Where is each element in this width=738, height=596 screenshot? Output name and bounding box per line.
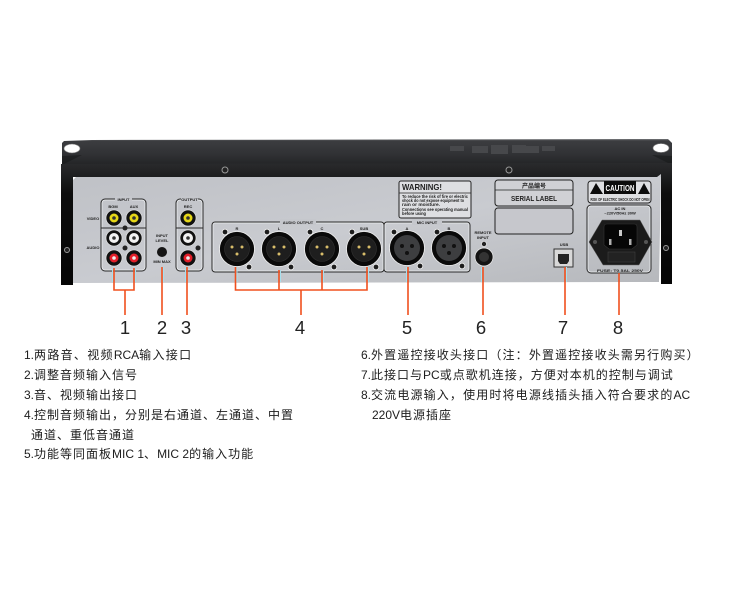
descriptions right: 6.外置遥控接收头接口（注：外置遥控接收头需另行购买） bbox=[361, 347, 700, 362]
descriptions left: 1.两路音、视频RCA输入接口 bbox=[24, 347, 192, 362]
descriptions left: 5.功能等同面板MIC 1、MIC 2的输入功能 bbox=[24, 446, 254, 461]
output RCA panel: REC bbox=[184, 204, 192, 209]
input RCA panel: AUX bbox=[130, 204, 139, 209]
descriptions right bbox=[361, 347, 700, 422]
warning label: WARNING! bbox=[402, 182, 442, 192]
descriptions left bbox=[24, 347, 294, 461]
top lid bbox=[62, 139, 672, 165]
RCA jacks bbox=[106, 210, 142, 266]
mic input panel bbox=[384, 219, 470, 272]
mic input panel: B bbox=[448, 226, 451, 231]
input RCA panel: INPUT bbox=[118, 197, 130, 202]
callout numbers: 3 bbox=[181, 317, 191, 338]
top vents bbox=[450, 145, 555, 154]
black frame bbox=[61, 163, 672, 285]
device rear panel bbox=[61, 139, 672, 285]
channel labels: C bbox=[321, 226, 324, 231]
warning label: Connections see operating manual bbox=[402, 207, 468, 212]
channel labels: SUB bbox=[360, 226, 368, 231]
descriptions left: 通道、重低音通道 bbox=[31, 427, 135, 442]
audio output panel: AUDIO OUTPUT bbox=[283, 220, 314, 225]
output RCA panel bbox=[176, 196, 203, 271]
descriptions left: 4.控制音频输出，分别是右通道、左通道、中置 bbox=[24, 407, 294, 422]
XLR male connectors bbox=[220, 232, 382, 266]
lid corner plates bbox=[62, 155, 672, 165]
serial label: SERIAL LABEL bbox=[511, 196, 558, 203]
power inlet: ~220V/50Hz 30W bbox=[604, 210, 636, 216]
mic input panel: A bbox=[406, 226, 409, 231]
warning label: To reduce the risk of fire or electric bbox=[402, 194, 469, 199]
warning label: rain or moisture. bbox=[402, 202, 440, 207]
callout numbers: 6 bbox=[476, 317, 486, 338]
input RCA panel: AUDIO bbox=[87, 245, 99, 250]
remote input: REMOTE bbox=[474, 230, 492, 235]
serial label bbox=[495, 180, 573, 234]
descriptions right: 8.交流电源输入，使用时将电源线插头插入符合要求的AC bbox=[361, 387, 690, 402]
callout numbers: 1 bbox=[120, 317, 130, 338]
audio output panel bbox=[212, 219, 384, 272]
input level knob: MIN MAX bbox=[153, 259, 171, 264]
callout numbers: 8 bbox=[613, 317, 623, 338]
usb port bbox=[554, 242, 573, 267]
RCA jacks bbox=[180, 210, 200, 266]
input level knob bbox=[153, 233, 171, 264]
callout lines bbox=[112, 267, 619, 315]
connector screws bbox=[391, 229, 465, 269]
input RCA panel: BGM bbox=[108, 204, 118, 209]
caution label: CAUTION bbox=[606, 184, 635, 193]
input level knob: LEVEL bbox=[156, 238, 169, 243]
callout numbers bbox=[120, 317, 623, 338]
channel labels: L bbox=[278, 226, 281, 231]
caution label bbox=[588, 181, 651, 203]
output RCA panel: OUTPUT bbox=[181, 197, 198, 202]
descriptions right: 220V电源插座 bbox=[372, 407, 452, 422]
grey panel bbox=[73, 174, 661, 283]
power inlet: FUSE: T0.5AL 250V bbox=[597, 268, 643, 273]
warning label: before using bbox=[402, 211, 426, 216]
remote input bbox=[474, 230, 493, 266]
usb port: USB bbox=[560, 242, 568, 247]
connector screws bbox=[222, 229, 379, 270]
descriptions left: 3.音、视频输出接口 bbox=[24, 387, 138, 402]
mounting holes bbox=[64, 144, 669, 153]
descriptions left: 2.调整音频输入信号 bbox=[24, 367, 138, 382]
XLR female connectors bbox=[390, 230, 466, 266]
caution label: RISK OF ELECTRIC SHOCK DO NOT OPEN bbox=[590, 197, 650, 202]
callout numbers: 2 bbox=[157, 317, 167, 338]
remote input: INPUT bbox=[477, 235, 490, 240]
channel labels: R bbox=[236, 226, 239, 231]
power inlet bbox=[587, 205, 652, 273]
mic input panel: MIC INPUT bbox=[417, 220, 438, 225]
screws bbox=[64, 167, 668, 252]
power inlet: AC IN bbox=[615, 206, 626, 211]
input RCA panel bbox=[87, 196, 146, 271]
callout numbers: 4 bbox=[295, 317, 305, 338]
input level knob: INPUT bbox=[156, 233, 169, 238]
input RCA panel: VIDEO bbox=[87, 216, 99, 221]
warning label: shock do not expose equipment to bbox=[402, 198, 464, 203]
channel labels bbox=[236, 226, 368, 231]
serial label: 产品编号 bbox=[522, 182, 546, 190]
callout numbers: 5 bbox=[402, 317, 412, 338]
warning label bbox=[399, 181, 471, 218]
descriptions right: 7.此接口与PC或点歌机连接，方便对本机的控制与调试 bbox=[361, 367, 674, 382]
callout numbers: 7 bbox=[558, 317, 568, 338]
